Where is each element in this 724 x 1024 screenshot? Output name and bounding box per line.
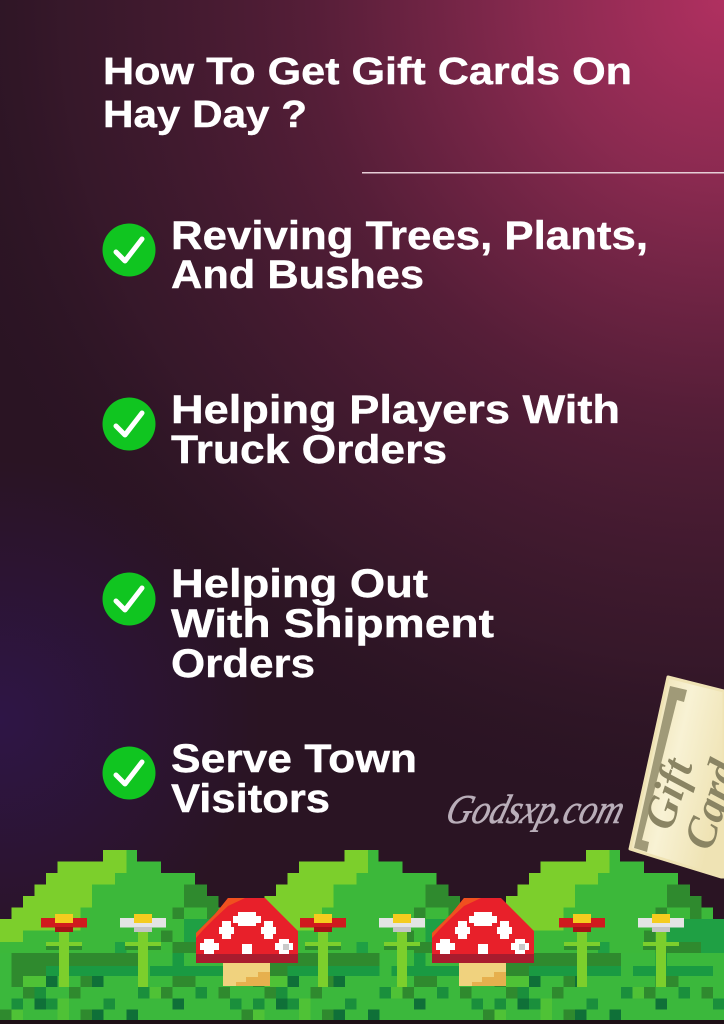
icon: green check — [102, 224, 156, 276]
flower: red 2 — [300, 914, 346, 987]
flower: red 1 — [41, 914, 87, 987]
item text — [171, 388, 620, 472]
item text: Orders — [171, 642, 315, 686]
card text — [634, 751, 724, 855]
flower: white 2 — [379, 914, 425, 987]
item text: Helping Players With — [171, 388, 620, 432]
item text — [171, 214, 648, 297]
item text: Helping Out — [171, 562, 428, 606]
bottom strip — [0, 1020, 724, 1024]
title: How To Get Gift Cards On — [103, 51, 632, 93]
title — [103, 51, 632, 136]
title: Hay Day ? — [103, 94, 307, 136]
list item: town visitors — [102, 737, 417, 821]
watermark: Godsxp.com — [441, 788, 630, 833]
flower: white 3 — [638, 914, 684, 987]
list item: shipment orders — [102, 562, 494, 686]
ground pattern — [0, 953, 724, 1020]
mushroom 2 — [432, 898, 534, 986]
flower: red 3 — [559, 914, 605, 987]
card text: Gift — [634, 751, 703, 835]
item text: Serve Town — [171, 737, 417, 781]
list item: reviving trees — [102, 214, 648, 297]
item text: With Shipment — [171, 602, 494, 646]
item text: Reviving Trees, Plants, — [171, 214, 648, 258]
item text: And Bushes — [171, 253, 424, 297]
ground base — [0, 942, 724, 1020]
gift card — [630, 677, 724, 877]
list item: truck orders — [102, 388, 620, 472]
flower: white 1 — [120, 914, 166, 987]
item text: Truck Orders — [171, 428, 447, 472]
card bracket — [634, 686, 687, 852]
pixel scene: hills, flowers, mushrooms — [0, 850, 724, 1020]
icon: green check — [102, 398, 156, 450]
item text: Visitors — [171, 777, 330, 821]
item text — [171, 562, 494, 686]
divider line — [362, 172, 724, 174]
icon: green check — [102, 746, 156, 800]
icon: green check — [102, 572, 156, 626]
hills — [0, 850, 724, 953]
item text — [171, 737, 417, 821]
mushroom 1 — [196, 898, 298, 986]
